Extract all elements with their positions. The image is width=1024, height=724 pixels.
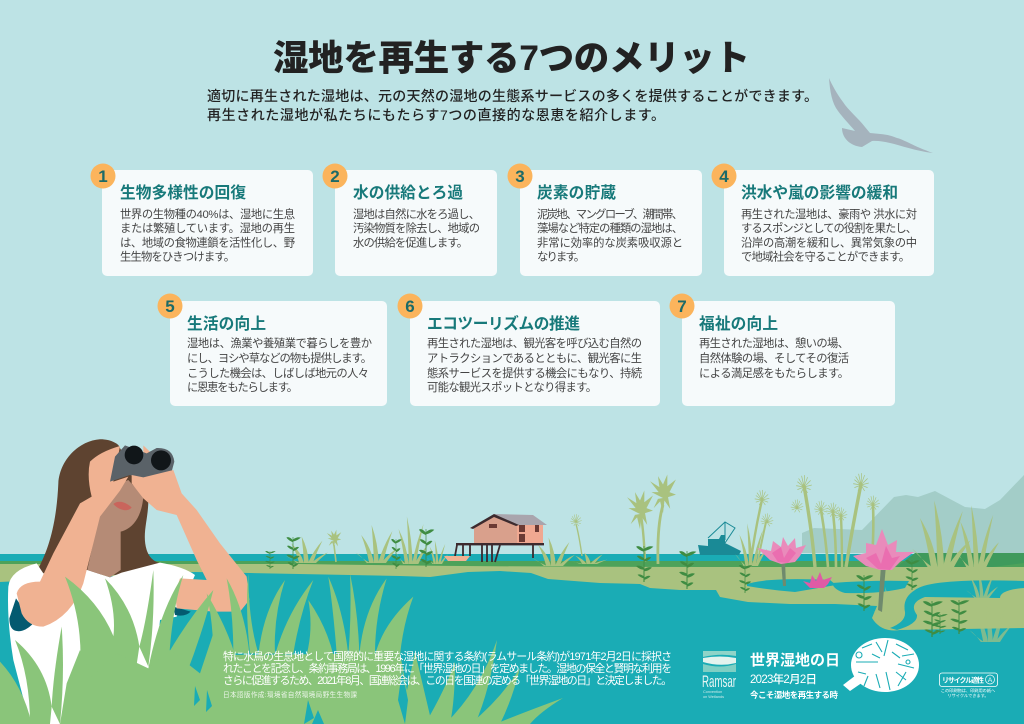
Ramsar logo: Convention	[703, 690, 722, 694]
grass tufts on far shore	[286, 500, 999, 567]
panel: card 6 ecotourism: 再生された湿地は、観光客を呼び込む自然の	[427, 336, 642, 350]
panel: card 3 carbon storage: 炭素の貯蔵	[537, 184, 616, 202]
footnote text: 特に水鳥の生息地として国際的に重要な湿地に関する条約(ラムサール条約)が1971年2月2日に採択さ	[223, 649, 672, 663]
icon: fishing boat	[698, 522, 741, 555]
recycle badge: この印刷物は、印刷用の紙へ	[941, 687, 995, 694]
panel: card 7 wellbeing: 自然体験の場、そしてその復活	[699, 351, 849, 365]
recycle badge: リサイクルできます。	[947, 693, 989, 699]
panel: card 5 livelihoods: 生活の向上	[187, 315, 266, 333]
icon: pink lotus flowers	[757, 529, 914, 612]
World Wetlands Day heading: 今こそ湿地を再生する時	[750, 690, 838, 700]
panel: card 4 flood mitigation: 沿岸の高潮を緩和し、異常気象の中	[741, 236, 917, 250]
panel: card 7 wellbeing	[670, 294, 895, 406]
panel: card 1 biodiversity: は、地域の食物連鎖を活性化し、野	[120, 236, 295, 250]
World Wetlands Day heading: 世界湿地の日	[750, 652, 840, 669]
panel: card 2 water filtration: 2	[330, 167, 340, 186]
panel: card 5 livelihoods: 湿地は、漁業や養殖業で暮らしを豊か	[187, 336, 372, 350]
footnote text: さらに促進するため、2021年8月、国連総会は、この日を国連の定める「世界湿地の日」と決定しました。	[223, 673, 672, 687]
panel: card 5 livelihoods: にし、ヨシや草などの物も提供します。	[187, 351, 372, 365]
panel: card 2 water filtration: 水の供給とろ過	[353, 184, 463, 202]
panel: card 7 wellbeing: 7	[677, 297, 687, 316]
panel: card 1 biodiversity: 生物多様性の回復	[120, 183, 246, 202]
icon: stilt house	[444, 514, 547, 562]
icon: palm trees	[627, 474, 676, 564]
panel: card 5 livelihoods: こうした機会は、しばしば地元の人々	[187, 367, 369, 380]
arms and hands	[17, 446, 128, 627]
mountains	[802, 475, 1024, 553]
Ramsar logo	[702, 651, 736, 699]
binoculars	[110, 445, 174, 484]
panel: card 3 carbon storage: なります。	[537, 250, 585, 264]
hair	[38, 439, 163, 575]
panel: card 7 wellbeing: 再生された湿地は、憩いの場、	[699, 336, 849, 350]
icon: papyrus reeds	[570, 473, 880, 567]
panel: card 4 flood mitigation: で地域社会を守ることができます。	[741, 250, 910, 264]
panel: card 6 ecotourism: 態系サービスを提供する機会にもなり、持続	[427, 366, 642, 380]
icon: mangrove sprigs	[265, 529, 969, 637]
World Wetlands Day heading: 2023年2月2日	[750, 672, 817, 686]
white shirt	[8, 563, 195, 724]
panel: card 3 carbon storage: 泥炭地、マングローブ、潮間帯、	[537, 207, 683, 221]
intro text: 適切に再生された湿地は、元の天然の湿地の生態系サービスの多くを提供することができます。	[207, 88, 818, 104]
lips	[113, 502, 132, 510]
panel: card 4 flood mitigation: 洪水や嵐の影響の緩和	[741, 183, 898, 202]
panel: card 7 wellbeing: による満足感をもたらします。	[699, 366, 849, 380]
panel: card 5 livelihoods: 5	[165, 297, 175, 316]
panel: card 4 flood mitigation: 4	[719, 167, 729, 186]
panel: card 6 ecotourism	[398, 294, 660, 406]
panel: card 1 biodiversity: 1	[98, 167, 108, 186]
woman with binoculars	[8, 439, 249, 724]
panel: card 2 water filtration: 湿地は自然に水をろ過し、	[353, 207, 480, 221]
panel: card 6 ecotourism: アトラクションであるとともに、観光客に生	[427, 351, 642, 365]
teal gaps in grass	[194, 670, 408, 724]
panel: card 2 water filtration: 水の供給を促進します。	[353, 236, 468, 250]
recycle badge: リサイクル適性	[942, 676, 984, 684]
World Wetlands Day emblem	[843, 638, 919, 692]
panel: card 6 ecotourism: 6	[405, 297, 415, 316]
panel: card 4 flood mitigation: 再生された湿地は、豪雨や 洪水に対	[741, 207, 917, 221]
panel: card 4 flood mitigation: するスポンジとしての役割を果たし、	[741, 221, 917, 235]
face and neck	[87, 480, 143, 577]
recycle badge: A	[988, 677, 993, 684]
panel: card 3 carbon storage: 藻場など特定の種類の湿地は、	[537, 221, 683, 235]
footnote text	[223, 649, 672, 699]
foreground grass	[0, 570, 563, 724]
title: 湿地を再生する7つのメリット	[273, 38, 750, 78]
panel: card 3 carbon storage	[508, 164, 702, 276]
wetland shore	[0, 553, 1024, 630]
footnote text: 日本語版作成:環境省自然環境局野生生物課	[223, 690, 357, 699]
panel: card 1 biodiversity: 生生物をひきつけます。	[120, 250, 235, 264]
panel: card 6 ecotourism: 可能な観光スポットとなり得ます。	[427, 380, 597, 394]
intro text	[207, 88, 818, 123]
panel: card 2 water filtration	[322, 164, 497, 276]
panel: card 7 wellbeing: 福祉の向上	[699, 315, 778, 333]
sleeves	[9, 598, 191, 631]
recycle badge	[940, 673, 998, 699]
panel: card 1 biodiversity: または繁殖しています。湿地の再生	[120, 221, 295, 235]
World Wetlands Day heading	[750, 652, 840, 700]
panel: card 6 ecotourism: エコツーリズムの推進	[427, 314, 580, 333]
water: lagoon	[0, 554, 1024, 724]
Ramsar logo: on Wetlands	[703, 695, 724, 699]
panel: card 3 carbon storage: 3	[515, 167, 525, 186]
Ramsar logo: Ramsar	[702, 672, 736, 691]
footnote text: れたことを記念し、条約事務局は、1996年に「世界湿地の日」を定めました。湿地の保全と賢明な利用を	[223, 661, 672, 675]
icon: flying bird	[829, 78, 933, 153]
panel: card 4 flood mitigation	[712, 164, 934, 276]
icon: pond grasses	[873, 570, 1012, 642]
panel: card 1 biodiversity	[90, 164, 313, 276]
panel: card 2 water filtration: 汚染物質を除去し、地域の	[353, 221, 480, 235]
panel: card 5 livelihoods: に恩恵をもたらします。	[187, 380, 298, 394]
intro text: 再生された湿地が私たちにもたらす7つの直接的な恩恵を紹介します。	[207, 107, 665, 123]
panel: card 3 carbon storage: 非常に効率的な炭素吸収源と	[537, 236, 683, 250]
panel: card 1 biodiversity: 世界の生物種の40%は、湿地に生息	[120, 207, 295, 221]
panel: card 5 livelihoods	[158, 294, 387, 406]
